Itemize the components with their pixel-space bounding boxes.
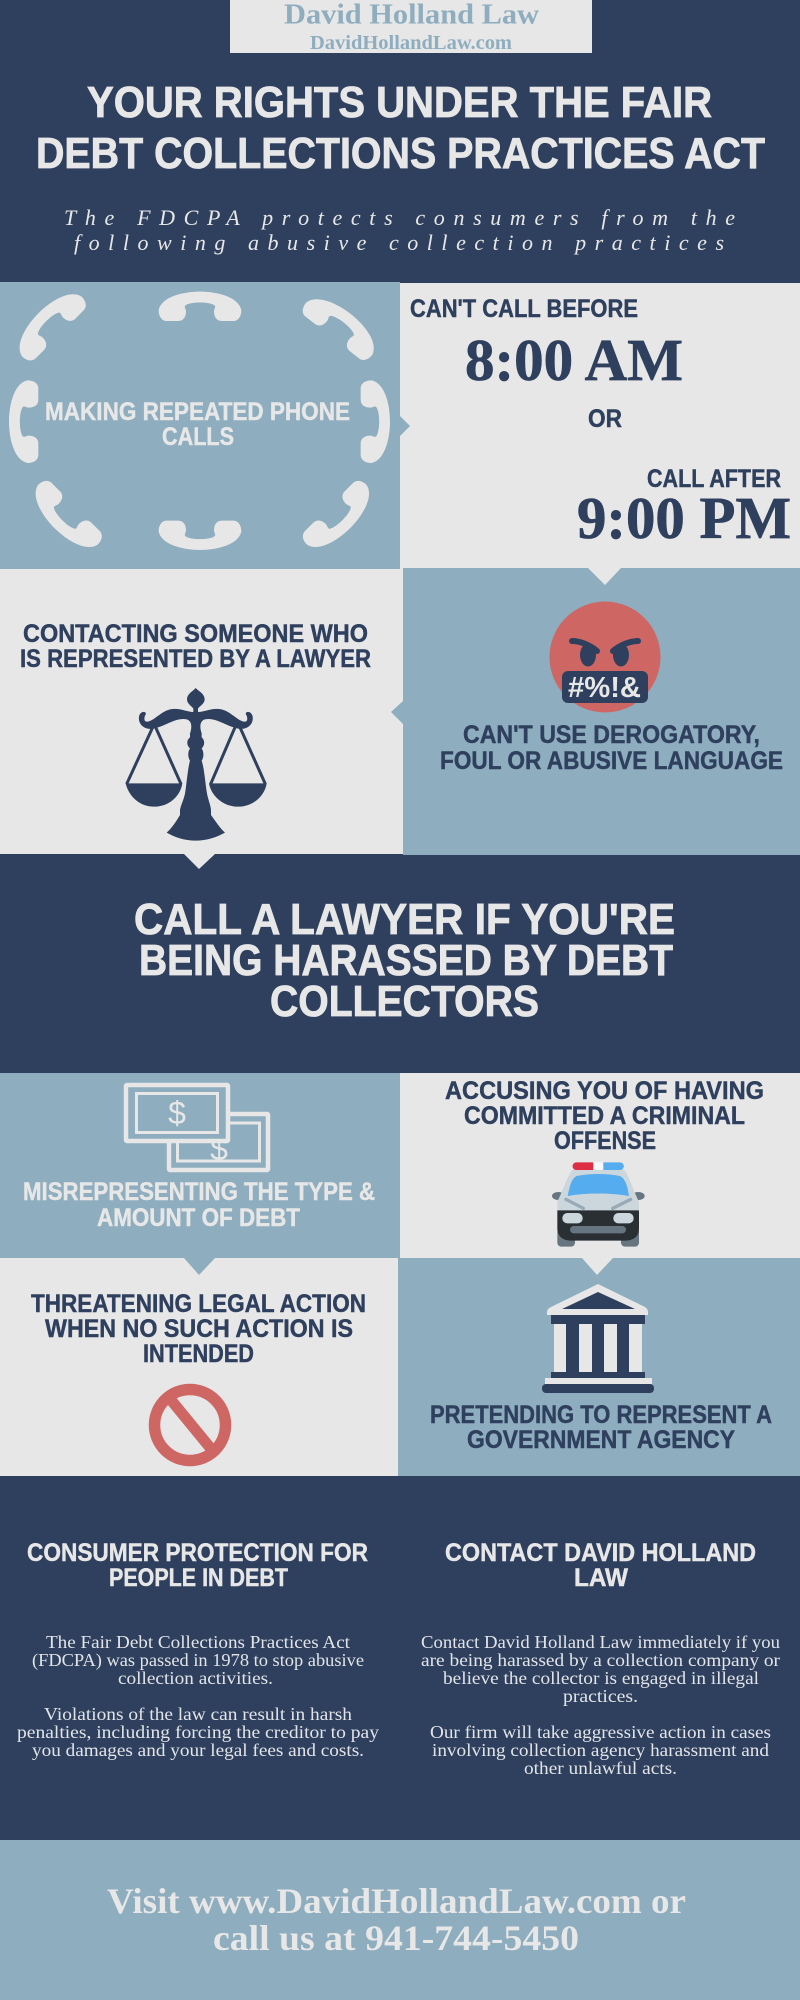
number: 9:00 PM: 9:00 PM xyxy=(577,485,791,551)
title xyxy=(36,79,765,178)
arrow: hours to language xyxy=(588,568,621,585)
text: visit website or call xyxy=(107,1881,686,1958)
text block: about the FDCPA: collection activities. xyxy=(118,1668,273,1688)
subtitle: The FDCPA protects consumers from the xyxy=(64,205,735,230)
panel: header xyxy=(0,0,800,283)
heading: threatening: WHEN NO SUCH ACTION IS xyxy=(45,1315,353,1343)
panel: government agency xyxy=(398,1258,800,1476)
panel: represented by a lawyer xyxy=(0,569,403,854)
heading: contact xyxy=(445,1539,756,1592)
title: YOUR RIGHTS UNDER THE FAIR xyxy=(87,79,712,127)
text block: about the FDCPA: The Fair Debt Collections Practices Act xyxy=(46,1632,350,1652)
text block: about the FDCPA: penalties, including forcing the creditor to pay xyxy=(17,1722,379,1742)
text block: contact details: Our firm will take aggressive action in cases xyxy=(430,1722,771,1742)
heading: accusing xyxy=(445,1077,764,1155)
heading: derogatory language xyxy=(440,721,783,775)
text: call after: CALL AFTER xyxy=(647,465,781,493)
text block: contact details: involving collection agency harassment and xyxy=(432,1740,769,1760)
text block: about the FDCPA: Violations of the law can result in harsh xyxy=(44,1704,352,1724)
heading: contacting someone: CONTACTING SOMEONE WHO xyxy=(23,620,368,648)
text block: about the FDCPA xyxy=(17,1632,379,1760)
arrow: offense to agency xyxy=(582,1258,613,1275)
text block: about the FDCPA: (FDCPA) was passed in 1978 to stop abusive xyxy=(32,1650,364,1670)
heading: threatening: THREATENING LEGAL ACTION xyxy=(31,1290,366,1318)
icon: banknotes: $ xyxy=(168,1095,186,1131)
heading: call a lawyer: CALL A LAWYER IF YOU'RE xyxy=(134,896,675,944)
heading: pretending: GOVERNMENT AGENCY xyxy=(467,1426,735,1454)
text: can't call before: CAN'T CALL BEFORE xyxy=(410,295,638,323)
text: or: OR xyxy=(588,405,622,433)
heading: consumer protection xyxy=(27,1539,368,1592)
panel: call a lawyer banner xyxy=(0,855,800,1073)
arrow: phone calls to hours xyxy=(400,416,410,436)
heading: contacting someone: IS REPRESENTED BY A LAWYER xyxy=(20,645,371,673)
heading: misrepresenting xyxy=(23,1178,375,1232)
text: visit website or call: call us at 941-744-5450 xyxy=(213,1918,579,1958)
subtitle: following abusive collection practices xyxy=(74,230,724,255)
heading: making repeated phone calls: MAKING REPEATED PHONE xyxy=(45,398,350,426)
text block: about the FDCPA: you damages and your legal fees and costs. xyxy=(32,1740,364,1760)
subtitle xyxy=(64,205,735,255)
heading: contacting someone xyxy=(20,620,371,673)
arrow: lawyer to banner xyxy=(184,854,215,869)
heading: call a lawyer: BEING HARASSED BY DEBT xyxy=(139,937,673,985)
heading: threatening: INTENDED xyxy=(143,1340,254,1368)
panel: repeated phone calls xyxy=(0,282,400,570)
text: visit website or call: Visit www.DavidHollandLaw.com or xyxy=(107,1881,686,1921)
heading: misrepresenting: AMOUNT OF DEBT xyxy=(97,1204,300,1232)
icon: scales of justice xyxy=(126,688,267,841)
panel: calling hours xyxy=(400,283,800,569)
icon: banknotes: $ xyxy=(210,1131,228,1167)
heading: misrepresenting: MISREPRESENTING THE TYPE & xyxy=(23,1178,375,1206)
heading: call a lawyer: COLLECTORS xyxy=(270,978,539,1026)
panel: abusive language xyxy=(403,568,800,856)
panel: footer call to action xyxy=(0,1840,800,2000)
heading: accusing: ACCUSING YOU OF HAVING xyxy=(445,1077,764,1105)
arrow: debt to threatening xyxy=(184,1258,215,1275)
panel: threatening legal action xyxy=(0,1258,398,1476)
text block: contact details: are being harassed by a collection company or xyxy=(421,1650,780,1670)
icon: police car xyxy=(552,1162,645,1247)
logo box: DavidHollandLaw.com xyxy=(310,32,512,54)
number: 8:00 AM: 8:00 AM xyxy=(465,327,683,393)
heading: accusing: OFFENSE xyxy=(554,1127,656,1155)
text block: contact details: Contact David Holland Law immediately if you xyxy=(421,1632,780,1652)
icon: government building xyxy=(542,1284,654,1393)
icon: angry face: #%!& xyxy=(568,672,641,704)
heading: call a lawyer xyxy=(134,896,675,1026)
panel: criminal offense xyxy=(400,1073,800,1258)
panel: information columns xyxy=(0,1476,800,1840)
icon: angry face xyxy=(550,602,660,712)
heading: contact: LAW xyxy=(574,1564,628,1592)
heading: making repeated phone calls: CALLS xyxy=(162,423,234,451)
text block: contact details xyxy=(421,1632,780,1778)
text block: contact details: other unlawful acts. xyxy=(524,1758,677,1778)
heading: accusing: COMMITTED A CRIMINAL xyxy=(464,1102,745,1130)
panel: misrepresenting debt xyxy=(0,1073,400,1258)
text block: contact details: believe the collector is engaged in illegal xyxy=(443,1668,759,1688)
heading: consumer protection: PEOPLE IN DEBT xyxy=(109,1564,288,1592)
heading: contact: CONTACT DAVID HOLLAND xyxy=(445,1539,756,1567)
text block: contact details: practices. xyxy=(563,1686,638,1706)
heading: threatening xyxy=(31,1290,366,1368)
heading: derogatory language: CAN'T USE DEROGATORY, xyxy=(463,721,760,749)
heading: consumer protection: CONSUMER PROTECTION FOR xyxy=(27,1539,368,1567)
arrow: language to lawyer xyxy=(391,701,403,724)
heading: making repeated phone calls xyxy=(45,398,350,451)
icon: banknotes xyxy=(126,1085,268,1170)
heading: pretending xyxy=(430,1401,772,1454)
icon: ring of phone handsets xyxy=(9,283,390,558)
icon: prohibition sign xyxy=(154,1390,226,1460)
logo box xyxy=(230,0,592,54)
